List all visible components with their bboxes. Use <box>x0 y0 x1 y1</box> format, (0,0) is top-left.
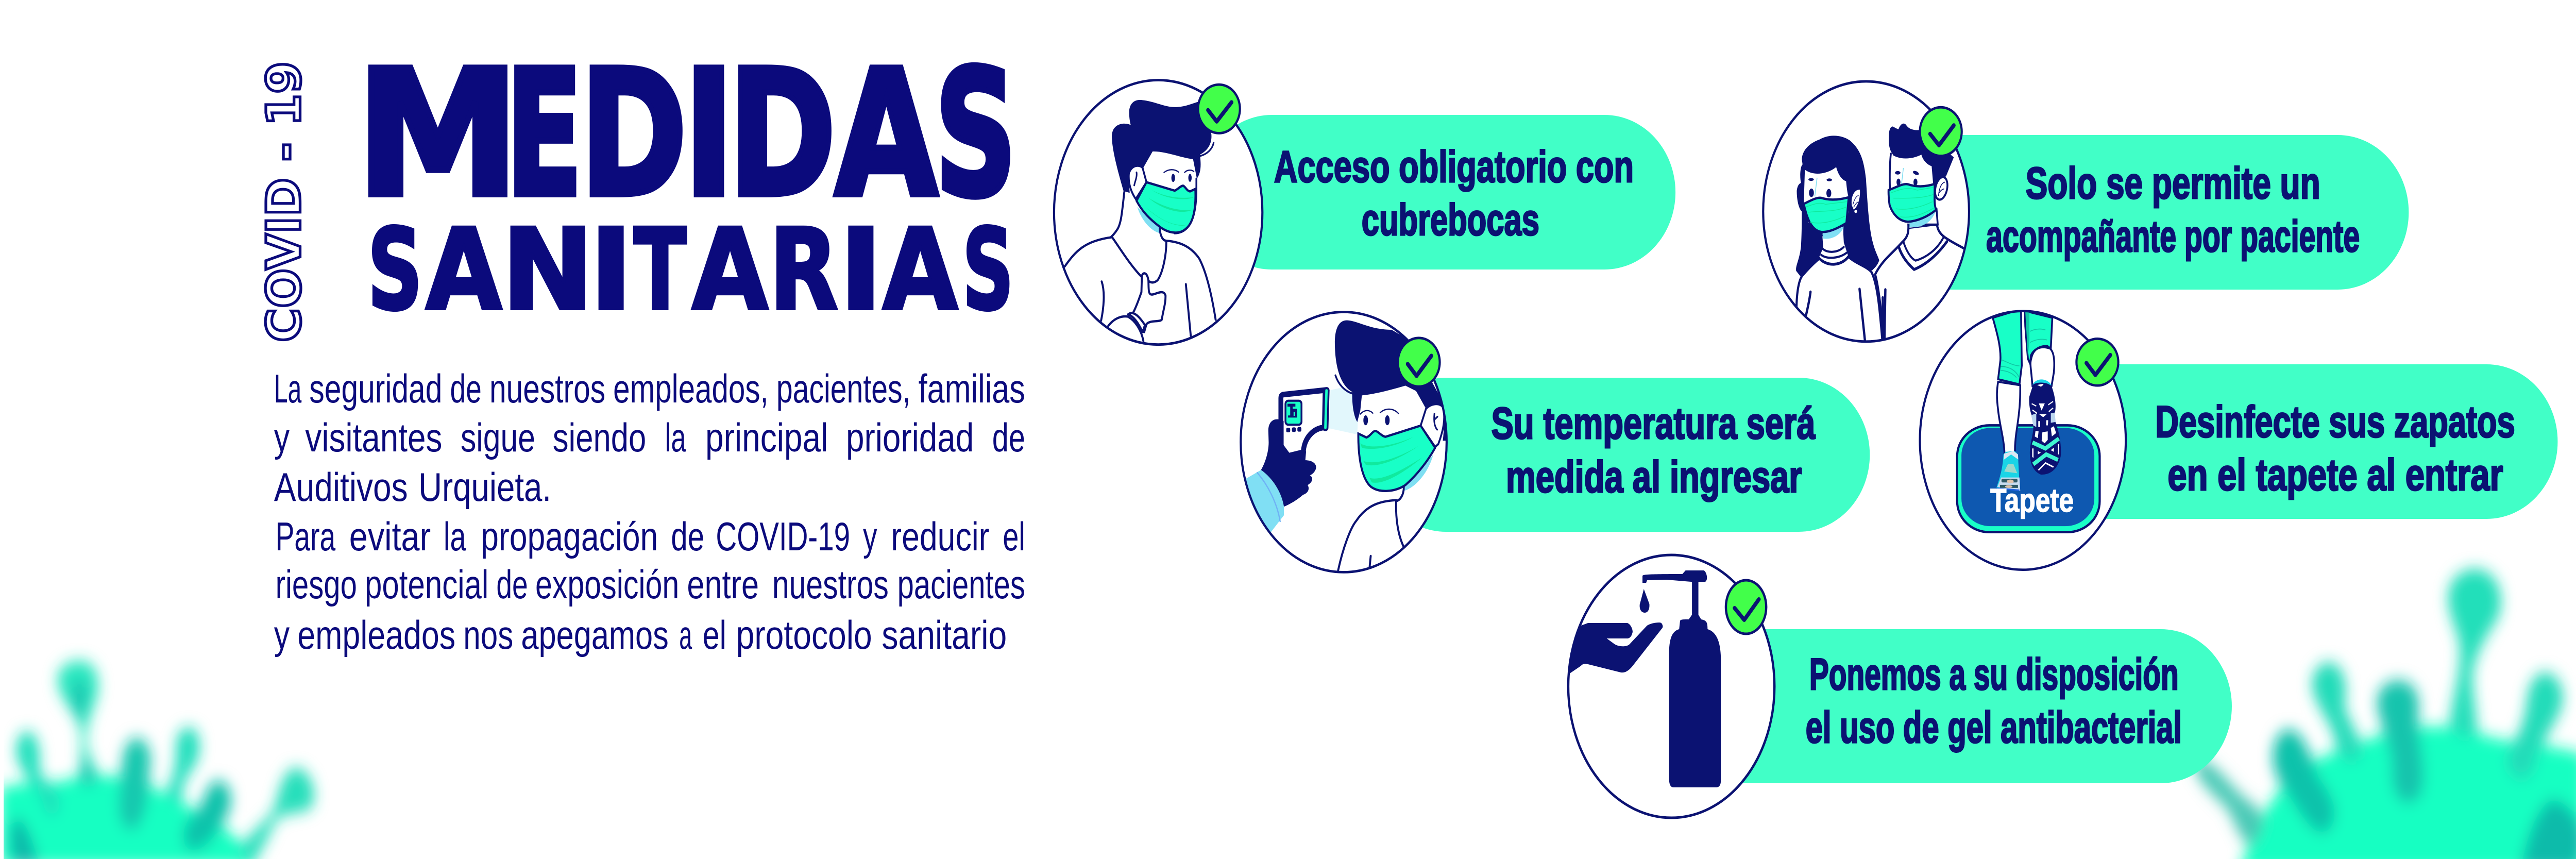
text block: intro paragraph: de <box>992 415 1025 460</box>
title: SANITARIAS: R <box>770 205 838 335</box>
title: MEDIDAS: E <box>506 33 583 235</box>
text block: intro paragraph: empleados, <box>613 366 769 411</box>
panel: gel antibacterial <box>1558 555 2232 818</box>
text block: intro paragraph: COVID-19 <box>716 514 850 559</box>
text block: intro paragraph: de <box>671 514 704 559</box>
mat label: Tapete <box>1990 482 2074 519</box>
icon: check badge <box>1398 338 1440 386</box>
text block: intro paragraph: riesgo <box>276 562 357 607</box>
title: MEDIDAS: M <box>356 33 520 235</box>
pill text <box>2155 397 2515 500</box>
pill text <box>1986 159 2360 261</box>
pill text: Ponemos a su disposición <box>1809 650 2179 699</box>
text block: intro paragraph <box>274 366 1025 658</box>
text block: intro paragraph: la <box>444 514 466 559</box>
icon: shoes on disinfecting mat <box>1920 309 2126 570</box>
text block: intro paragraph: y <box>274 612 290 658</box>
pill background <box>1375 378 1870 532</box>
pill text: el uso de gel antibacterial <box>1806 703 2182 752</box>
panel: desinfecte sus zapatos <box>1920 309 2557 570</box>
text block: intro paragraph: y <box>863 514 877 559</box>
pill text: medida al ingresar <box>1506 452 1802 502</box>
text block: intro paragraph: nos <box>463 612 513 658</box>
pill text: en el tapete al entrar <box>2167 450 2503 500</box>
pill text: Solo se permite un <box>2026 159 2320 208</box>
text block: intro paragraph: Urquieta. <box>418 464 551 510</box>
title: SANITARIAS: T <box>634 205 687 335</box>
title: SANITARIAS: A <box>883 205 958 335</box>
text block: intro paragraph: pacientes, <box>776 366 910 411</box>
text block: intro paragraph: exposición <box>535 562 679 607</box>
icon: check badge <box>1726 580 1766 634</box>
text block: intro paragraph: sanitario <box>882 612 1007 658</box>
pill text <box>1492 399 1816 502</box>
text block: intro paragraph: evitar <box>349 514 431 559</box>
heading: COVID - 19 vertical outlined label: COVID - 19 <box>257 61 311 342</box>
text block: intro paragraph: empleados <box>297 612 455 658</box>
text block: intro paragraph: de <box>450 366 482 411</box>
text block: intro paragraph: protocolo <box>736 612 872 658</box>
text block: intro paragraph: prioridad <box>846 415 974 460</box>
pill background <box>2016 364 2557 519</box>
pill background <box>1833 135 2409 290</box>
title: SANITARIAS: A <box>692 205 768 335</box>
text block: intro paragraph: apegamos <box>521 612 669 658</box>
text block: intro paragraph: nuestros <box>489 366 605 411</box>
text block: intro paragraph: siendo <box>553 415 646 460</box>
pill text <box>1806 650 2182 752</box>
panel: acceso obligatorio con cubrebocas <box>1054 80 1675 345</box>
title: SANITARIAS: S <box>962 205 1014 335</box>
pill text: Acceso obligatorio con <box>1274 142 1634 192</box>
title: SANITARIAS: A <box>426 205 502 335</box>
icon: woman and man with masks <box>1763 81 1977 349</box>
text block: intro paragraph: la <box>665 415 686 460</box>
icon: check badge <box>1920 107 1962 156</box>
title: MEDIDAS: I <box>684 33 734 235</box>
virus decoration bottom right <box>2195 569 2576 859</box>
pill text: cubrebocas <box>1362 195 1539 245</box>
icon: temperature check <box>1241 312 1448 572</box>
text block: intro paragraph: Auditivos <box>274 464 408 510</box>
title: MEDIDAS: D <box>728 33 836 235</box>
title: MEDIDAS: A <box>835 33 939 235</box>
text block: intro paragraph: familias <box>919 366 1025 411</box>
text block: intro paragraph: entre <box>687 562 759 607</box>
text block: intro paragraph: de <box>496 562 528 607</box>
pill background <box>1650 629 2232 783</box>
text block: intro paragraph: pacientes <box>897 562 1025 607</box>
title: MEDIDAS: D <box>580 33 687 235</box>
panel: solo un acompanante <box>1763 81 2409 349</box>
pill background <box>1201 115 1675 270</box>
pill text <box>1274 142 1634 245</box>
title: SANITARIAS: I <box>589 205 633 335</box>
text block: intro paragraph: reducir <box>891 514 989 559</box>
text block: intro paragraph: visitantes <box>305 415 442 460</box>
text block: intro paragraph: La <box>274 366 302 411</box>
title: MEDIDAS: S <box>935 33 1016 235</box>
text block: intro paragraph: propagación <box>481 514 658 559</box>
pill text: Su temperatura será <box>1492 399 1816 448</box>
text block: intro paragraph: nuestros <box>772 562 889 607</box>
title: SANITARIAS: S <box>367 205 422 335</box>
text block: intro paragraph: el <box>1003 514 1025 559</box>
icon: check badge <box>1198 85 1240 133</box>
pill text: acompañante por paciente <box>1986 212 2360 261</box>
text block: intro paragraph: y <box>274 415 290 460</box>
title: SANITARIAS: N <box>502 205 594 335</box>
text block: intro paragraph: Para <box>276 514 336 559</box>
text block: intro paragraph: potencial <box>365 562 488 607</box>
text block: intro paragraph: a <box>679 612 692 658</box>
title: SANITARIAS: I <box>839 205 883 335</box>
icon: check badge <box>2076 339 2119 385</box>
text block: intro paragraph: principal <box>705 415 828 460</box>
icon: man with mask thumbs up <box>1054 80 1262 345</box>
text block: intro paragraph: sigue <box>461 415 535 460</box>
icon: gel dispenser and hand <box>1558 555 1774 818</box>
panel: su temperatura sera medida <box>1241 312 1870 572</box>
text block: intro paragraph: el <box>703 612 726 658</box>
text block: intro paragraph: seguridad <box>309 366 442 411</box>
virus decoration bottom left <box>0 661 314 859</box>
